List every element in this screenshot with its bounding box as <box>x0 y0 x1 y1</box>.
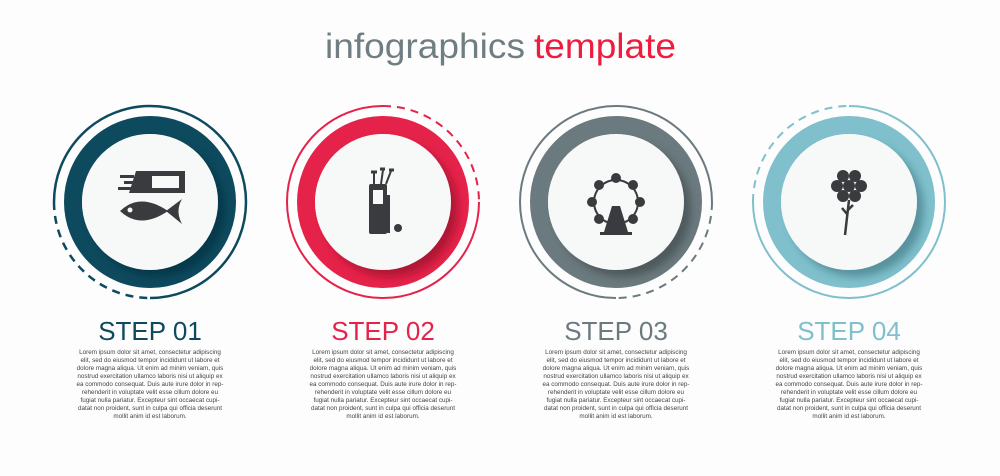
text block: step 2: rehenderit in voluptate velit esse cillum dolore eu <box>315 389 452 396</box>
text block: step 2: datat non proident, sunt in culpa qui officia deserunt <box>311 405 455 412</box>
heading: step 2: STEP 02 <box>331 316 435 346</box>
text block: step 1 <box>76 349 224 420</box>
ring: step 3 <box>520 106 712 298</box>
text block: step 1: datat non proident, sunt in culpa qui officia deserunt <box>78 405 222 412</box>
panel: step 2 <box>287 106 479 420</box>
text block: step 3: mollit anim id est laborum. <box>579 413 653 420</box>
icon: golf bag <box>369 169 402 234</box>
text block: step 4: rehenderit in voluptate velit esse cillum dolore eu <box>781 389 918 396</box>
text block: step 2: nostrud exercitation ullamco laboris nisi ut aliquip ex <box>310 373 456 380</box>
heading: step 1: STEP 01 <box>98 316 202 346</box>
text block: step 1: nostrud exercitation ullamco laboris nisi ut aliquip ex <box>77 373 223 380</box>
text block: step 4: datat non proident, sunt in culpa qui officia deserunt <box>777 405 921 412</box>
text block: step 2 <box>309 349 457 420</box>
icon: clover <box>831 170 867 235</box>
text block: step 3: dolore magna aliqua. Ut enim ad minim veniam, quis <box>543 365 689 372</box>
text block: step 2: Lorem ipsum dolor sit amet, consectetur adipiscing <box>312 349 454 356</box>
text block: step 2: dolore magna aliqua. Ut enim ad minim veniam, quis <box>310 365 456 372</box>
text block: step 4: mollit anim id est laborum. <box>812 413 886 420</box>
title: template <box>534 27 676 66</box>
text block: step 1: dolore magna aliqua. Ut enim ad minim veniam, quis <box>77 365 223 372</box>
text block: step 2: elit, sed do eiusmod tempor incididunt ut labore et <box>314 357 453 364</box>
text block: step 1: fugiat nulla pariatur. Excepteur sint occaecat cupi- <box>81 397 219 404</box>
title: infographics <box>325 27 525 66</box>
text block: step 3: ea commodo consequat. Duis aute irure dolor in rep- <box>542 381 690 388</box>
panel: step 1 <box>54 106 246 420</box>
text block: step 4: fugiat nulla pariatur. Excepteur sint occaecat cupi- <box>780 397 918 404</box>
text block: step 2: fugiat nulla pariatur. Excepteur sint occaecat cupi- <box>314 397 452 404</box>
text block: step 1: Lorem ipsum dolor sit amet, consectetur adipiscing <box>79 349 221 356</box>
text block: step 4: Lorem ipsum dolor sit amet, consectetur adipiscing <box>778 349 920 356</box>
panel: step 4 <box>753 106 945 420</box>
text block: step 1: rehenderit in voluptate velit esse cillum dolore eu <box>82 389 219 396</box>
text block: step 3: nostrud exercitation ullamco laboris nisi ut aliquip ex <box>543 373 689 380</box>
title <box>325 27 676 66</box>
heading: step 3: STEP 03 <box>564 316 668 346</box>
icon: fish delivery <box>118 171 185 224</box>
panel: step 3 <box>520 106 712 420</box>
text block: step 4: ea commodo consequat. Duis aute irure dolor in rep- <box>775 381 923 388</box>
heading: step 4: STEP 04 <box>797 316 901 346</box>
text block: step 3: elit, sed do eiusmod tempor incididunt ut labore et <box>547 357 686 364</box>
text block: step 3: Lorem ipsum dolor sit amet, consectetur adipiscing <box>545 349 687 356</box>
text block: step 3 <box>542 349 690 420</box>
text block: step 2: mollit anim id est laborum. <box>346 413 420 420</box>
text block: step 3: fugiat nulla pariatur. Excepteur sint occaecat cupi- <box>547 397 685 404</box>
text block: step 4: dolore magna aliqua. Ut enim ad minim veniam, quis <box>776 365 922 372</box>
ring: step 4 <box>753 106 945 298</box>
ring: step 2 <box>287 106 479 298</box>
text block: step 3: rehenderit in voluptate velit esse cillum dolore eu <box>548 389 685 396</box>
text block: step 1: elit, sed do eiusmod tempor incididunt ut labore et <box>81 357 220 364</box>
text block: step 1: ea commodo consequat. Duis aute irure dolor in rep- <box>76 381 224 388</box>
icon: ferris wheel <box>587 173 645 235</box>
text block: step 4: elit, sed do eiusmod tempor incididunt ut labore et <box>780 357 919 364</box>
text block: step 1: mollit anim id est laborum. <box>113 413 187 420</box>
ring: step 1 <box>54 106 246 298</box>
text block: step 4 <box>775 349 923 420</box>
text block: step 2: ea commodo consequat. Duis aute irure dolor in rep- <box>309 381 457 388</box>
text block: step 3: datat non proident, sunt in culpa qui officia deserunt <box>544 405 688 412</box>
text block: step 4: nostrud exercitation ullamco laboris nisi ut aliquip ex <box>776 373 922 380</box>
